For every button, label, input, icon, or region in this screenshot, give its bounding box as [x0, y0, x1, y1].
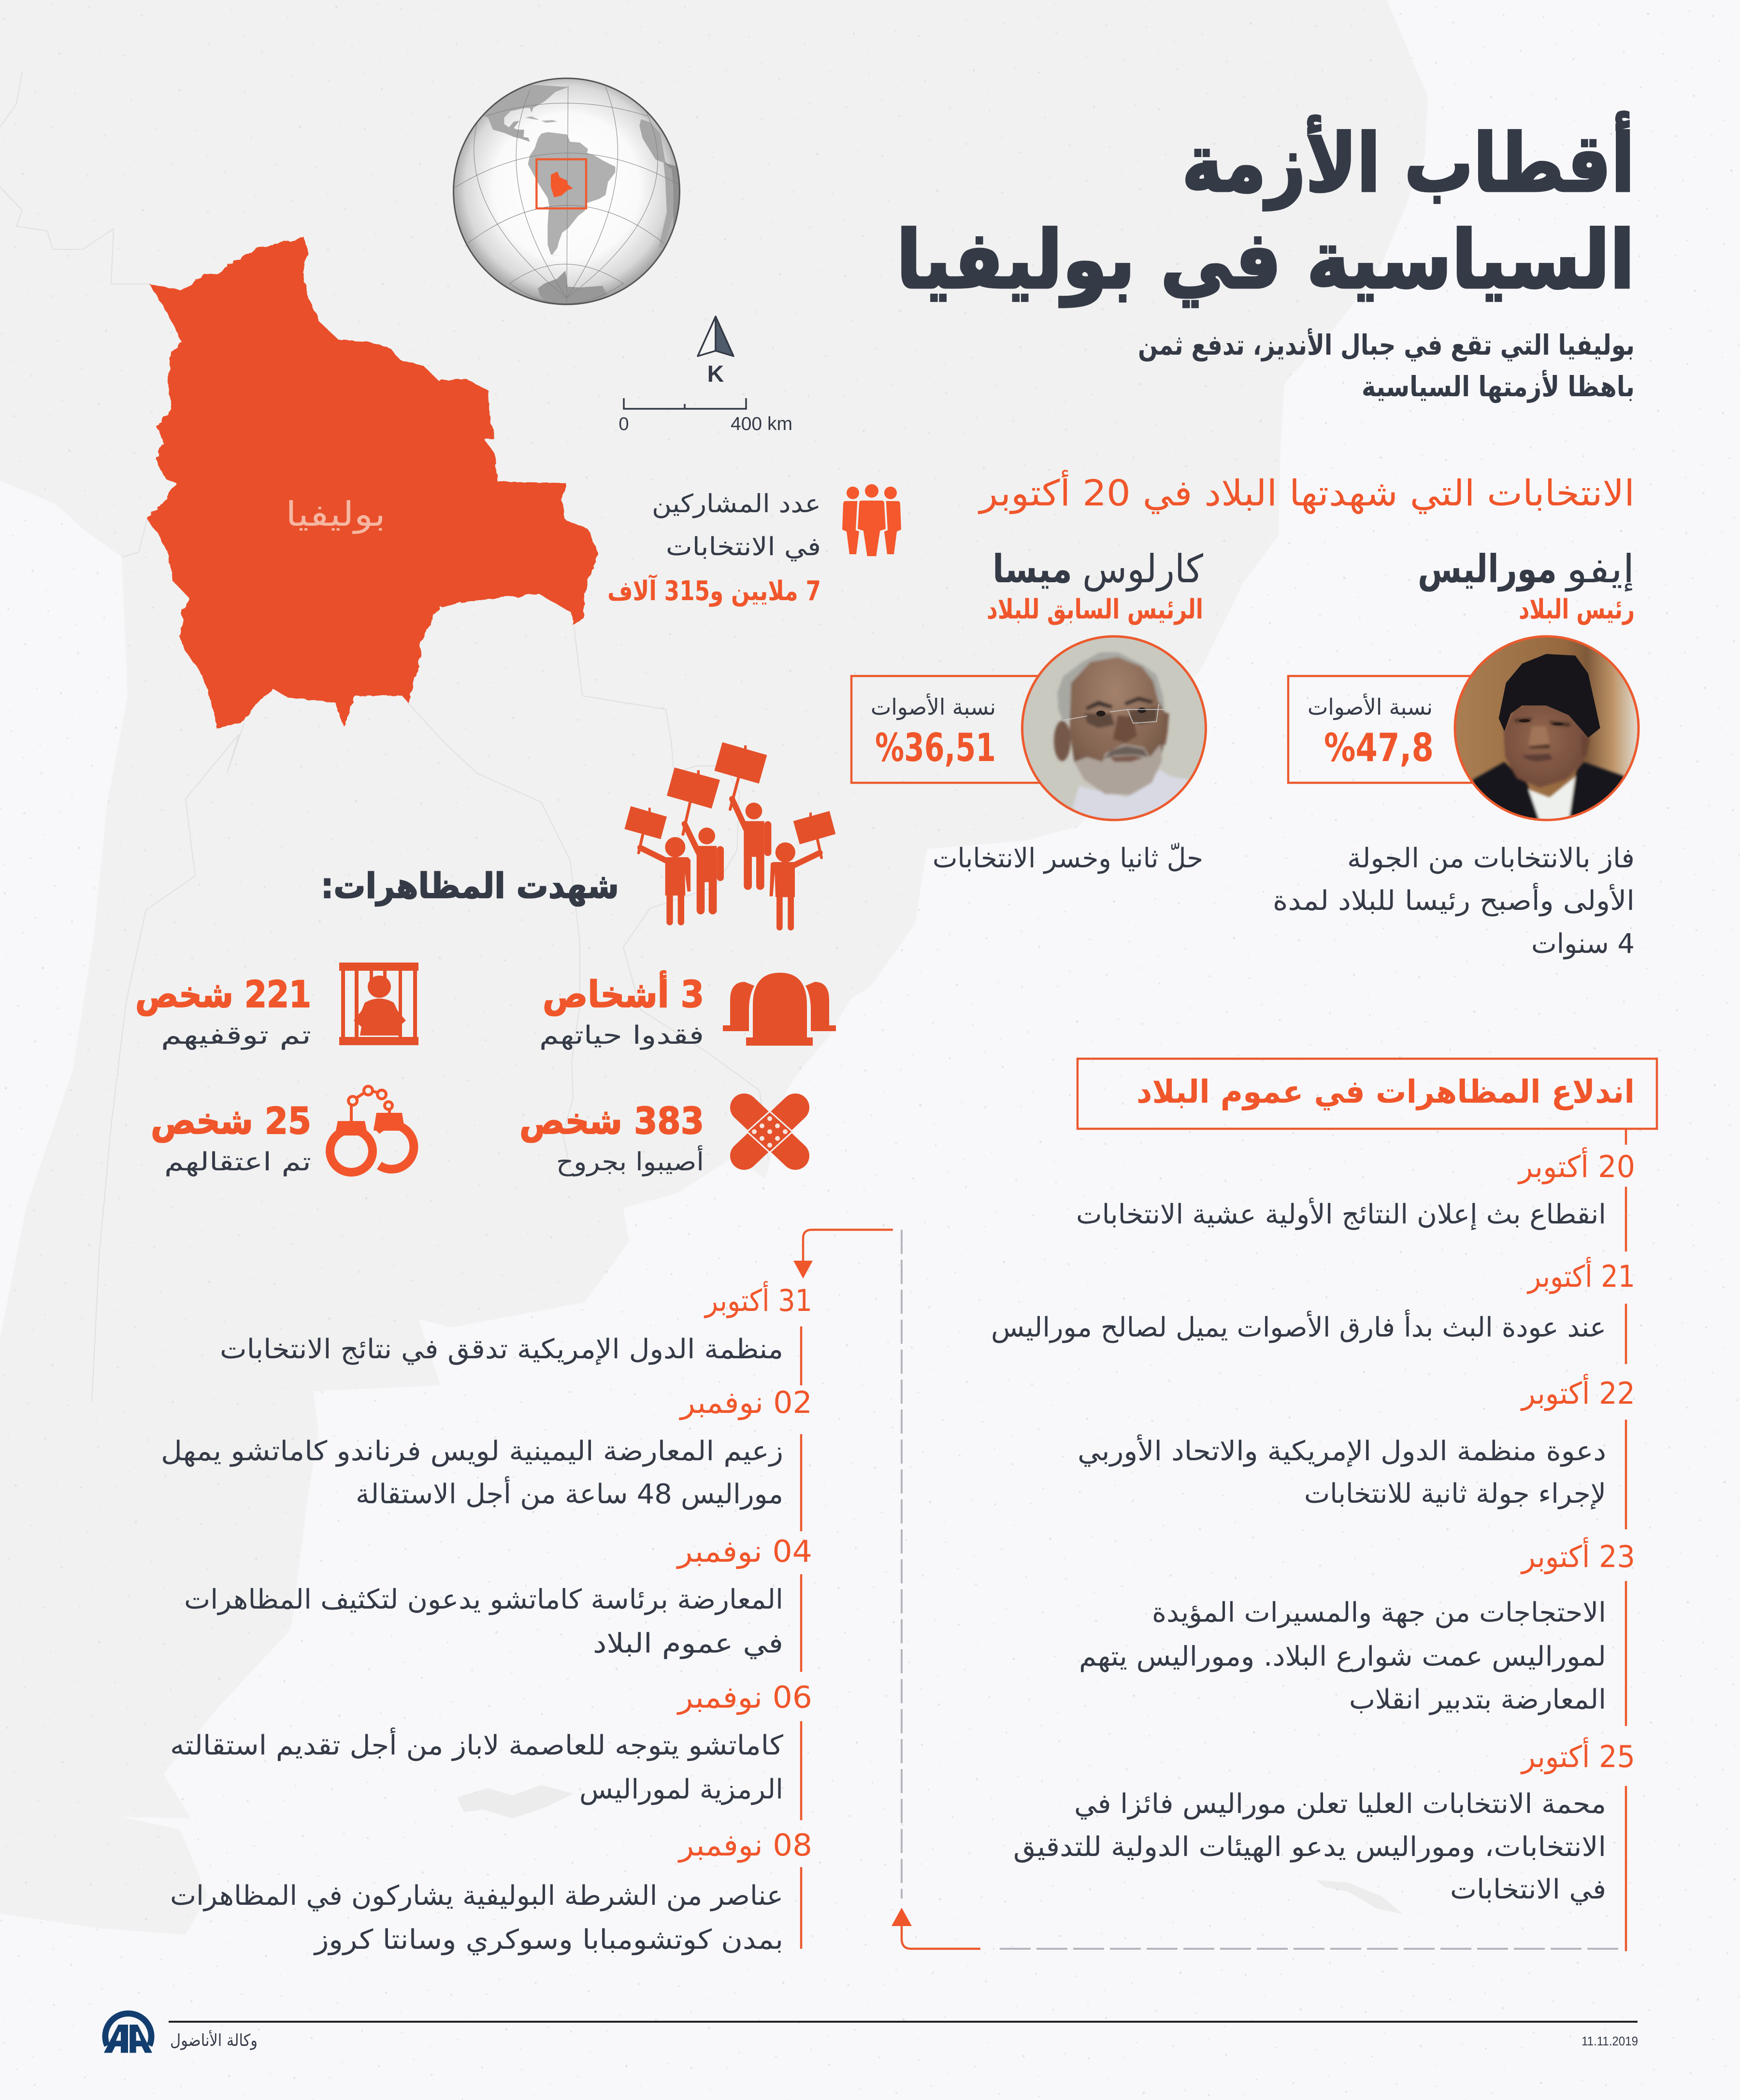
- name: موراليس: [1418, 547, 1557, 592]
- title: أقطاب الأزمة: [1182, 112, 1635, 210]
- event: 8 November: بمدن كوتشومبابا وسوكري وسانتا كروز: [313, 1924, 783, 1956]
- icon: crossed bandages: [744, 1108, 795, 1156]
- event: 31 October: [220, 1281, 812, 1365]
- name: ميسا: [992, 547, 1072, 591]
- logo: Anadolu Agency: [104, 2014, 152, 2053]
- event: 2 November: زعيم المعارضة اليمينية لويس فرناندو كاماتشو يمهل: [161, 1436, 783, 1467]
- event: 23 October: المعارضة بتدبير انقلاب: [1349, 1684, 1606, 1715]
- description: [1273, 843, 1635, 960]
- participants text: 7 ملايين و315 آلاف: [607, 574, 821, 607]
- stat: deaths: فقدوا حياتهم: [539, 1021, 704, 1050]
- date: 11.11.2019: [1582, 2034, 1638, 2048]
- event: 21 October: عند عودة البث بدأ فارق الأصوات يميل لصالح موراليس: [991, 1309, 1606, 1343]
- event: 6 November: الرمزية لموراليس: [579, 1774, 783, 1805]
- vote box: [851, 676, 1064, 783]
- name: كارلوس: [1082, 547, 1204, 592]
- heading: protests: شهدت المظاهرات:: [321, 865, 619, 906]
- event: 21 October: [991, 1257, 1635, 1343]
- event: 22 October: 22 أكتوبر: [1520, 1374, 1635, 1411]
- icon: protesters with signs: [624, 742, 835, 927]
- event: 23 October: لموراليس عمت شوارع البلاد. وموراليس يتهم: [1079, 1641, 1606, 1672]
- stat: deaths: 3 أشخاص: [543, 970, 704, 1016]
- event: 4 November: 04 نوفمبر: [676, 1534, 812, 1569]
- description: 4 سنوات: [1531, 928, 1635, 960]
- event: 4 November: المعارضة برئاسة كاماتشو يدعون لتكثيف المظاهرات: [184, 1584, 783, 1615]
- icon: three people: [842, 484, 901, 557]
- scale bar: [618, 398, 792, 434]
- event: 25 October: في الانتخابات: [1450, 1874, 1606, 1905]
- participants text: [607, 489, 821, 607]
- event: 20 October: انقطاع بث إعلان النتائج الأولية عشية الانتخابات: [1076, 1197, 1606, 1231]
- event: 31 October: منظمة الدول الإمريكية تدقق في نتائج الانتخابات: [220, 1334, 783, 1365]
- event: 6 November: [170, 1680, 812, 1805]
- event: 25 October: 25 أكتوبر: [1520, 1737, 1635, 1774]
- event: 8 November: [170, 1827, 812, 1956]
- stat: deaths: [539, 970, 836, 1050]
- photo: Evo Morales: [1455, 636, 1639, 830]
- event: 23 October: [1079, 1537, 1635, 1715]
- stat: wounded: أصيبوا بجروح: [556, 1145, 704, 1177]
- event: 21 October: 21 أكتوبر: [1526, 1257, 1635, 1294]
- agency name: وكالة الأناضول: [170, 2030, 258, 2050]
- scale labels: 0: [618, 414, 629, 434]
- participants text: في الانتخابات: [666, 532, 821, 561]
- panel: Evo Morales: [1273, 547, 1639, 960]
- icon: handcuffs: [330, 1086, 414, 1172]
- event: 22 October: لإجراء جولة ثانية للانتخابات: [1304, 1478, 1606, 1510]
- vote box: نسبة الأصوات: [871, 693, 996, 720]
- event: 22 October: دعوة منظمة الدول الإمريكية والاتحاد الأوربي: [1078, 1434, 1606, 1467]
- panel: Carlos Mesa: [851, 547, 1206, 874]
- event: 23 October: 23 أكتوبر: [1520, 1537, 1635, 1574]
- stat: wounded: 383 شخص: [519, 1099, 704, 1143]
- event: 2 November: [161, 1385, 812, 1510]
- title: [896, 112, 1635, 307]
- description: الأولى وأصبح رئيسا للبلاد لمدة: [1273, 883, 1635, 917]
- heading: elections: الانتخابات التي شهدتها البلاد في 20 أكتوبر: [978, 470, 1635, 514]
- event: 8 November: عناصر من الشرطة البوليفية يشاركون في المظاهرات: [170, 1880, 783, 1912]
- title: السياسية في بوليفيا: [896, 214, 1635, 307]
- event: 20 October: [1076, 1147, 1635, 1231]
- heading box: protests across the country: اندلاع المظاهرات في عموم البلاد: [1136, 1073, 1635, 1111]
- event: 25 October: الانتخابات، وموراليس يدعو الهيئات الدولية للتدقيق: [1013, 1831, 1606, 1863]
- arrow: dashed connector from right column to left column: [793, 1230, 1618, 1949]
- north arrow letter: K: [707, 361, 724, 387]
- description: فاز بالانتخابات من الجولة: [1347, 843, 1635, 874]
- event: 25 October: محمة الانتخابات العليا تعلن موراليس فائزا في: [1074, 1788, 1606, 1820]
- event: 8 November: 08 نوفمبر: [677, 1827, 812, 1863]
- subtitle: بوليفيا التي تقع في جبال الأنديز، تدفع ثمن: [1138, 328, 1635, 362]
- photo: Carlos Mesa: [1022, 636, 1206, 821]
- description: حلّ ثانيا وخسر الانتخابات: [933, 842, 1203, 874]
- event: 4 November: [184, 1534, 812, 1659]
- vote box: نسبة الأصوات: [1308, 693, 1433, 720]
- event: 31 October: 31 أكتوبر: [704, 1281, 812, 1318]
- timeline: left column: [161, 1281, 812, 1956]
- label: Bolivia: بوليفيا: [286, 494, 386, 534]
- stat: arrested: [151, 1086, 414, 1177]
- event: 23 October: الاحتجاجات من جهة والمسيرات المؤيدة: [1152, 1597, 1606, 1628]
- scale bar: 400 km: [731, 414, 792, 434]
- name: [992, 547, 1204, 592]
- name: إيفو: [1565, 547, 1635, 592]
- vote box: %36,51: [875, 725, 996, 770]
- vote box: [1288, 676, 1501, 783]
- event: 25 October: [1013, 1737, 1635, 1905]
- event: 2 November: 02 نوفمبر: [679, 1385, 812, 1420]
- event: 6 November: 06 نوفمبر: [676, 1680, 812, 1715]
- subtitle: [1138, 328, 1635, 403]
- stat: detained: تم توقفيهم: [161, 1021, 311, 1050]
- stat: arrested: تم اعتقالهم: [164, 1148, 311, 1177]
- icon: north arrow: [698, 316, 733, 387]
- icon: locator globe: [453, 78, 681, 305]
- stat: arrested: 25 شخص: [151, 1099, 311, 1143]
- event: 20 October: 20 أكتوبر: [1517, 1147, 1635, 1184]
- heading box: protests across the country: [1078, 1059, 1657, 1129]
- timeline: October right column: [991, 1129, 1635, 1951]
- vote box: %47,8: [1324, 725, 1434, 770]
- event: 6 November: كاماتشو يتوجه للعاصمة لاباز من أجل تقديم استقالته: [170, 1727, 783, 1761]
- stat: detained: [135, 963, 418, 1050]
- event: 4 November: في عموم البلاد: [593, 1628, 783, 1659]
- stat: detained: 221 شخص: [135, 973, 311, 1016]
- event: 2 November: موراليس 48 ساعة من أجل الاستقالة: [356, 1476, 783, 1510]
- icon: tombstones: [723, 973, 836, 1046]
- map: Bolivia: [147, 237, 598, 728]
- stat: wounded: [519, 1099, 795, 1177]
- event: 22 October: [1078, 1374, 1635, 1510]
- role: الرئيس السابق للبلاد: [987, 594, 1203, 625]
- role: رئيس البلاد: [1519, 594, 1635, 625]
- subtitle: باهظا لأزمتها السياسية: [1362, 370, 1635, 403]
- icon: prisoner behind bars: [339, 963, 418, 1045]
- footer: [104, 2014, 1638, 2053]
- participants text: عدد المشاركين: [652, 489, 821, 518]
